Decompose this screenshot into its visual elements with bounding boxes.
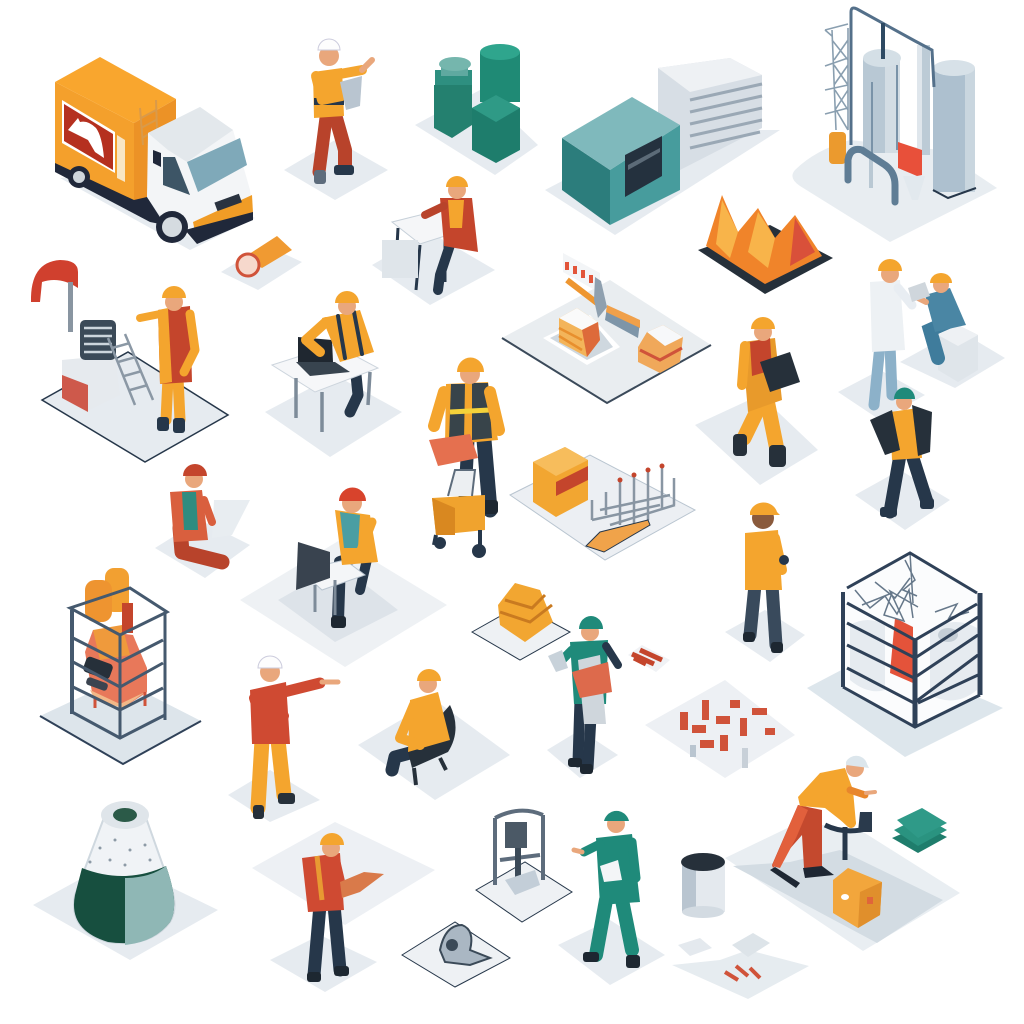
worker standing, side view [725,502,805,662]
green document stack [892,808,947,853]
worker with backpack [855,387,950,530]
platform with box and rows of pins [510,447,695,560]
scattered papers on tile [672,933,809,999]
teal machine and grey stack [545,58,780,235]
red small parts [628,645,670,672]
worker with laptop at table [265,291,402,457]
small orange goods on tile [472,583,570,660]
kneeling worker with laptop [155,464,250,578]
green storage tanks [415,44,538,175]
worker with teal helmet holding parcel [547,616,618,778]
orange box [833,868,882,928]
small press machine [476,811,572,922]
two workers and box top right [838,259,1005,420]
shelving unit with goods [40,568,201,764]
central worker with vest and cart [429,357,499,558]
bending worker on large tile [725,756,960,951]
worker with white helmet and clipboard [284,39,388,200]
worker pointing [228,656,338,822]
platform with bricks and barrier [502,253,711,403]
scattered red parts on tile [645,680,795,778]
industrial plant with tanks and pipes [792,8,997,242]
small mechanical part on tile [402,922,510,987]
glass flask [33,801,218,960]
wire cage with equipment [807,553,1003,757]
worker at desk [372,176,495,305]
orange crate item [221,236,302,290]
worker in teal overalls [558,811,665,985]
worker reading a book on tiles [252,822,435,992]
worker carrying dark case [695,317,818,485]
seated worker [358,669,510,800]
delivery truck [55,57,255,250]
worker typing on large platform [240,488,447,667]
platform with machine, sign and technician [31,260,228,462]
metal can [681,853,725,918]
flame-shaped orange chart [698,195,833,294]
